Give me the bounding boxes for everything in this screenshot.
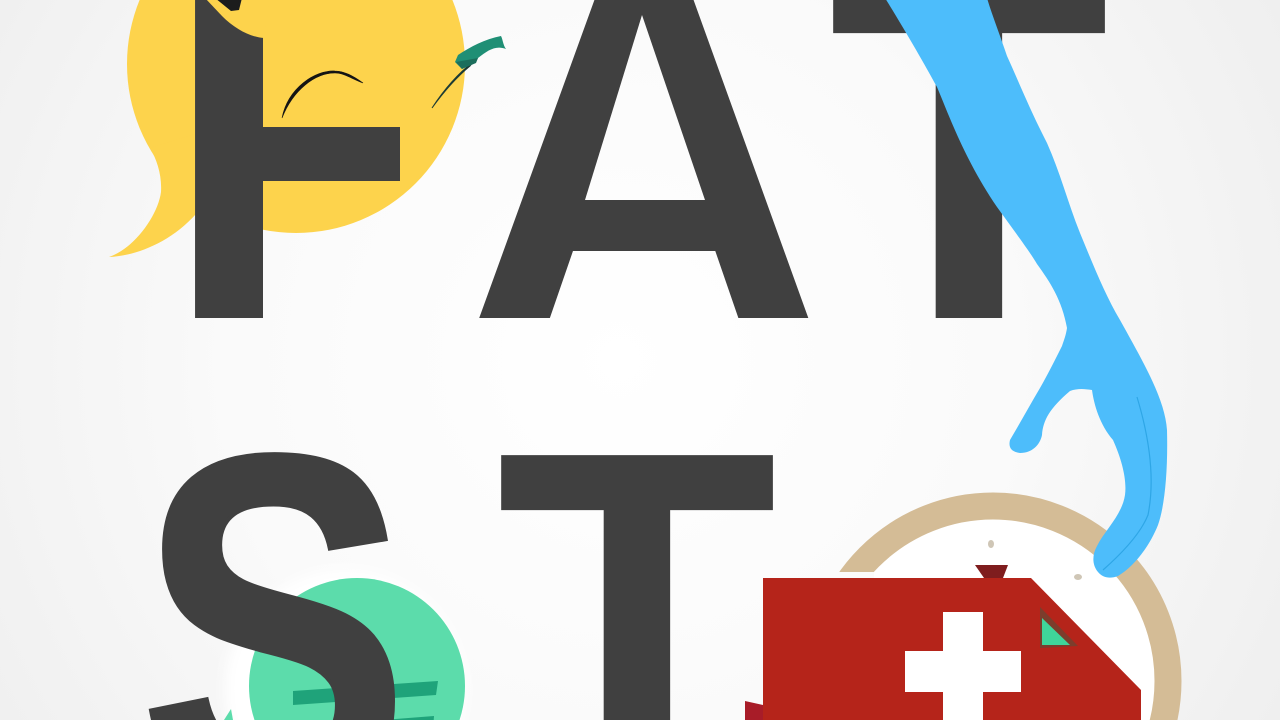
- kit side tab: [745, 701, 763, 720]
- icon: black tip at top of bubble: [215, 0, 242, 11]
- finger crease lines: [1103, 397, 1151, 570]
- icon: first aid kit on beige plate: [745, 506, 1168, 720]
- letter F middle arm: [262, 127, 400, 181]
- icon: curved eyebrow line: [282, 71, 363, 118]
- red kit body: [763, 578, 1141, 720]
- bubble fold covering top of F: [205, 0, 270, 38]
- icon: blue arm and hand: [885, 0, 1167, 578]
- beige plate ring: [818, 506, 1168, 720]
- white cross: [905, 612, 1021, 720]
- kit handle: [975, 565, 1008, 578]
- crumbs: [988, 540, 1082, 580]
- icon: yellow speech bubble: [109, 0, 465, 257]
- icon: green coin: [224, 578, 465, 720]
- letter A counter: [585, 15, 705, 200]
- kit corner mark: [1040, 607, 1078, 648]
- white glow behind green coin: [225, 570, 465, 720]
- letter A crossbar: [566, 198, 724, 251]
- icon: green quill: [432, 36, 506, 108]
